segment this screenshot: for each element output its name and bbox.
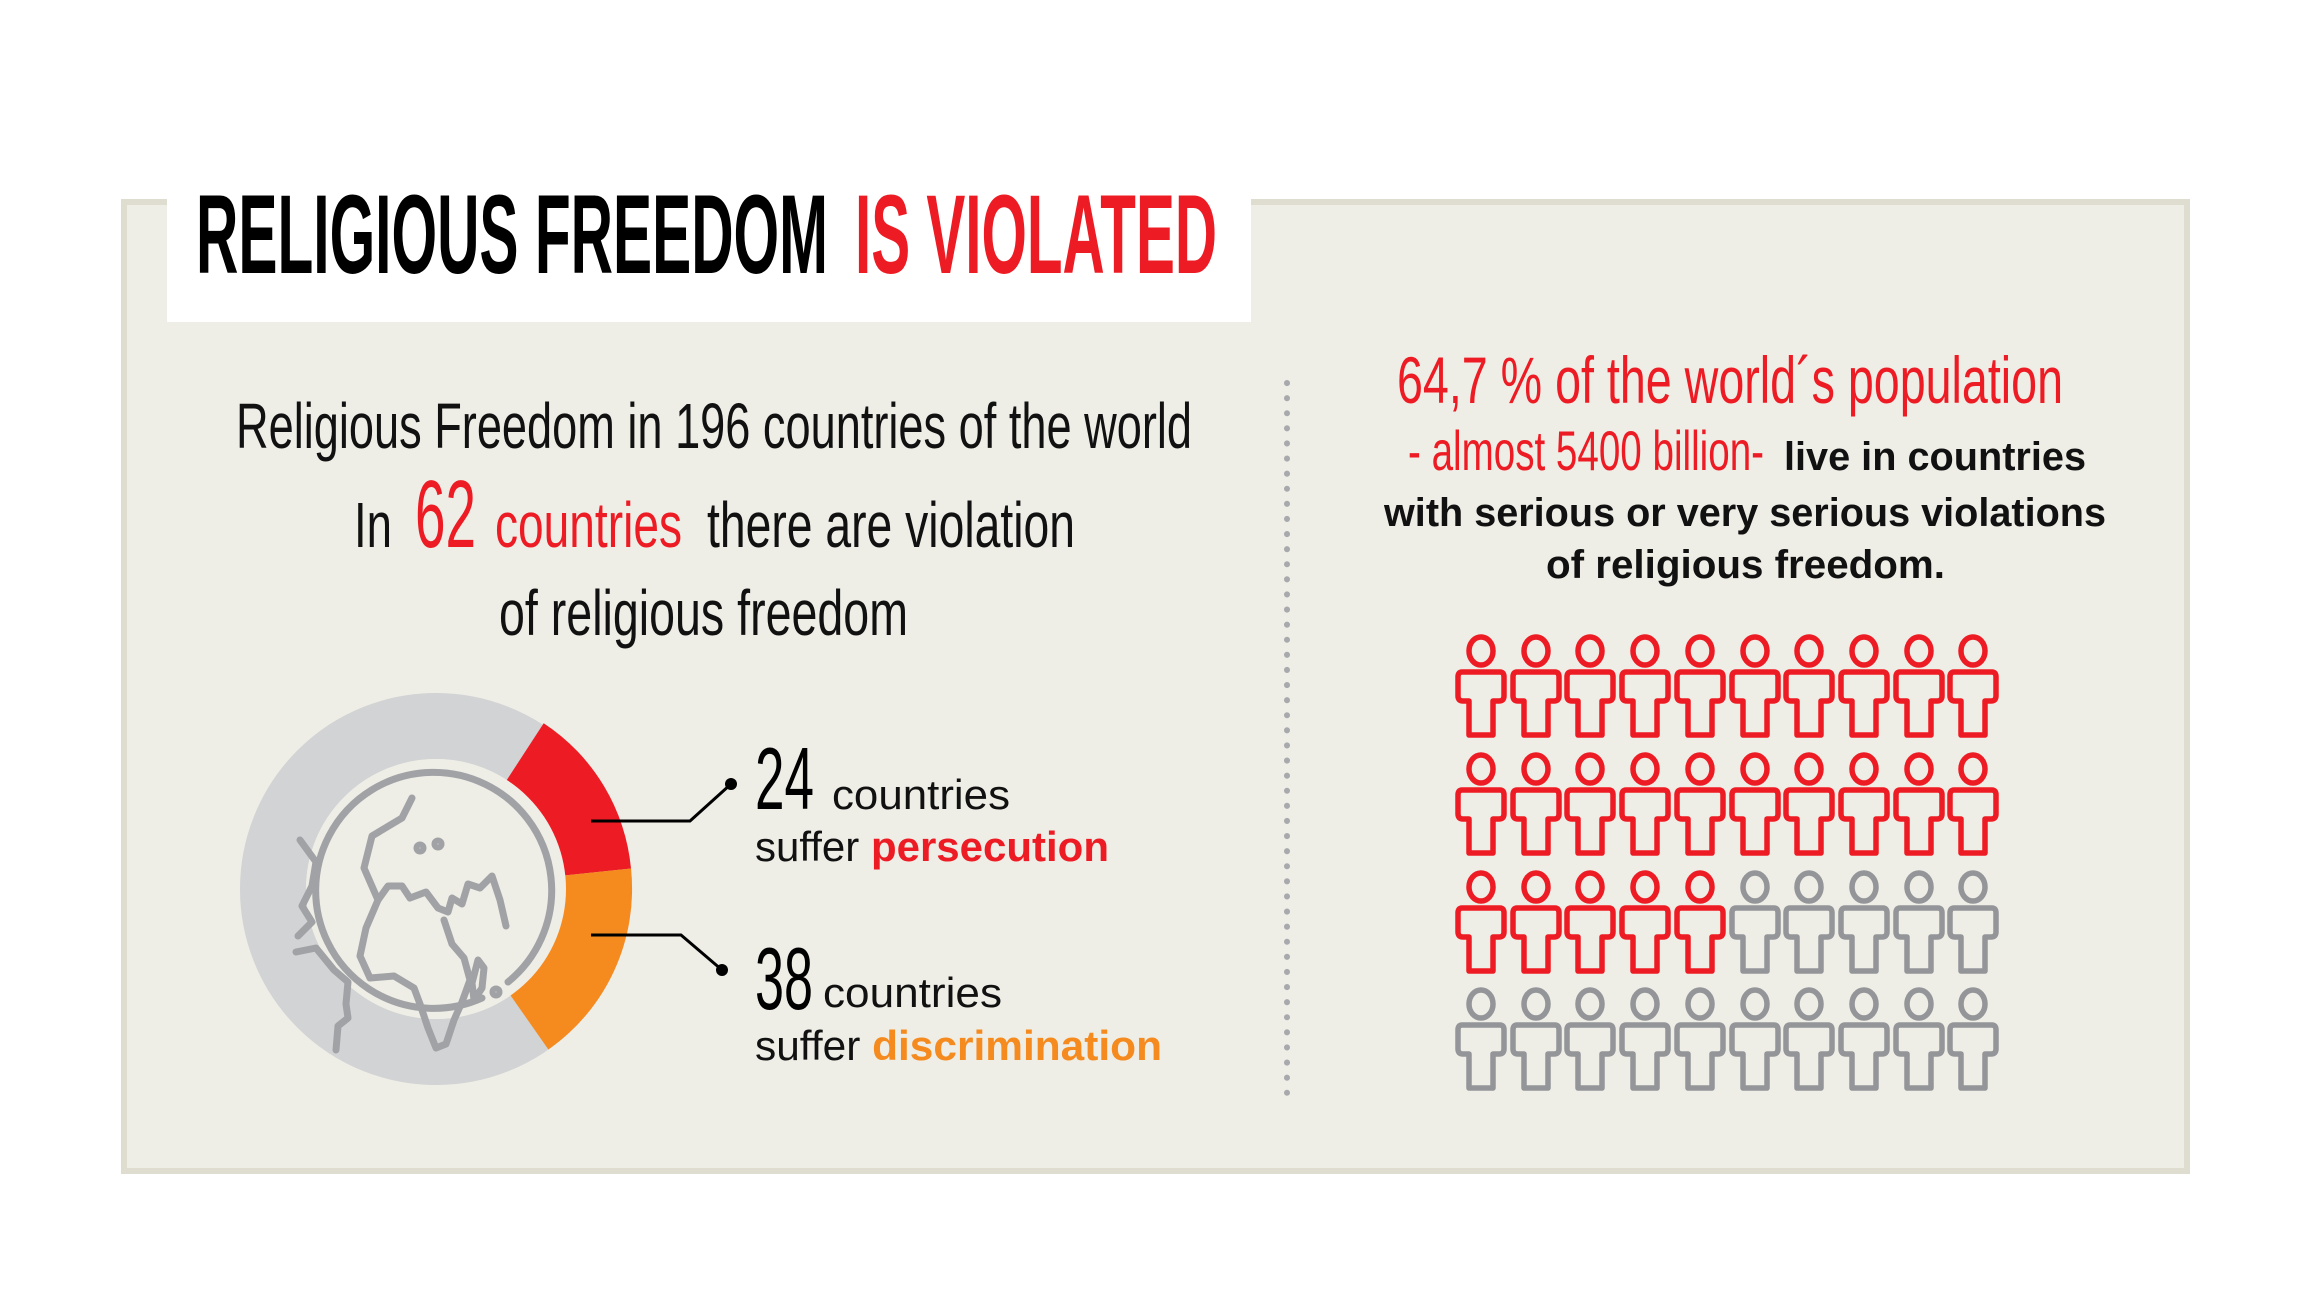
text block: left intro: countries <box>495 489 682 561</box>
stat: 38 discrimination: suffer discrimination <box>755 1022 1162 1069</box>
text block: left intro: of religious freedom <box>499 577 908 649</box>
text block: left intro <box>236 390 1192 649</box>
text block: population: - almost 5400 billion- <box>1408 419 1764 482</box>
stat: 38 discrimination: 38 <box>755 929 813 1028</box>
text block: population: with serious or very serious violations <box>1383 491 2106 535</box>
divider <box>1284 383 1290 1093</box>
icon: globe <box>296 772 552 1050</box>
stat: 24 persecution: suffer persecution <box>755 823 1109 870</box>
stat: 24 persecution <box>755 729 1109 870</box>
stat: 24 persecution: countries <box>832 771 1010 818</box>
stat: 24 persecution: 24 <box>755 729 814 828</box>
text block: population <box>1383 343 2106 587</box>
title red part: IS VIOLATED <box>855 172 1217 297</box>
title: RELIGIOUS FREEDOM <box>196 172 828 297</box>
callout leader: discrimination <box>591 935 728 976</box>
text block: left intro: In <box>354 489 392 561</box>
title box <box>167 170 1251 322</box>
text block: left intro: Religious Freedom in 196 countries of the world <box>236 390 1192 462</box>
icon grid: people <box>1458 637 1996 1088</box>
text block: left intro: 62 <box>415 461 476 568</box>
callout leader: persecution <box>591 778 737 821</box>
stat: 38 discrimination <box>755 929 1162 1069</box>
stat: 38 discrimination: countries <box>823 969 1002 1016</box>
panel: background frame <box>124 202 2187 1171</box>
text block: population: live in countries <box>1784 435 2086 479</box>
text block: left intro: there are violation <box>707 489 1075 561</box>
donut chart <box>273 723 632 1052</box>
text block: population: of religious freedom. <box>1546 543 1945 587</box>
